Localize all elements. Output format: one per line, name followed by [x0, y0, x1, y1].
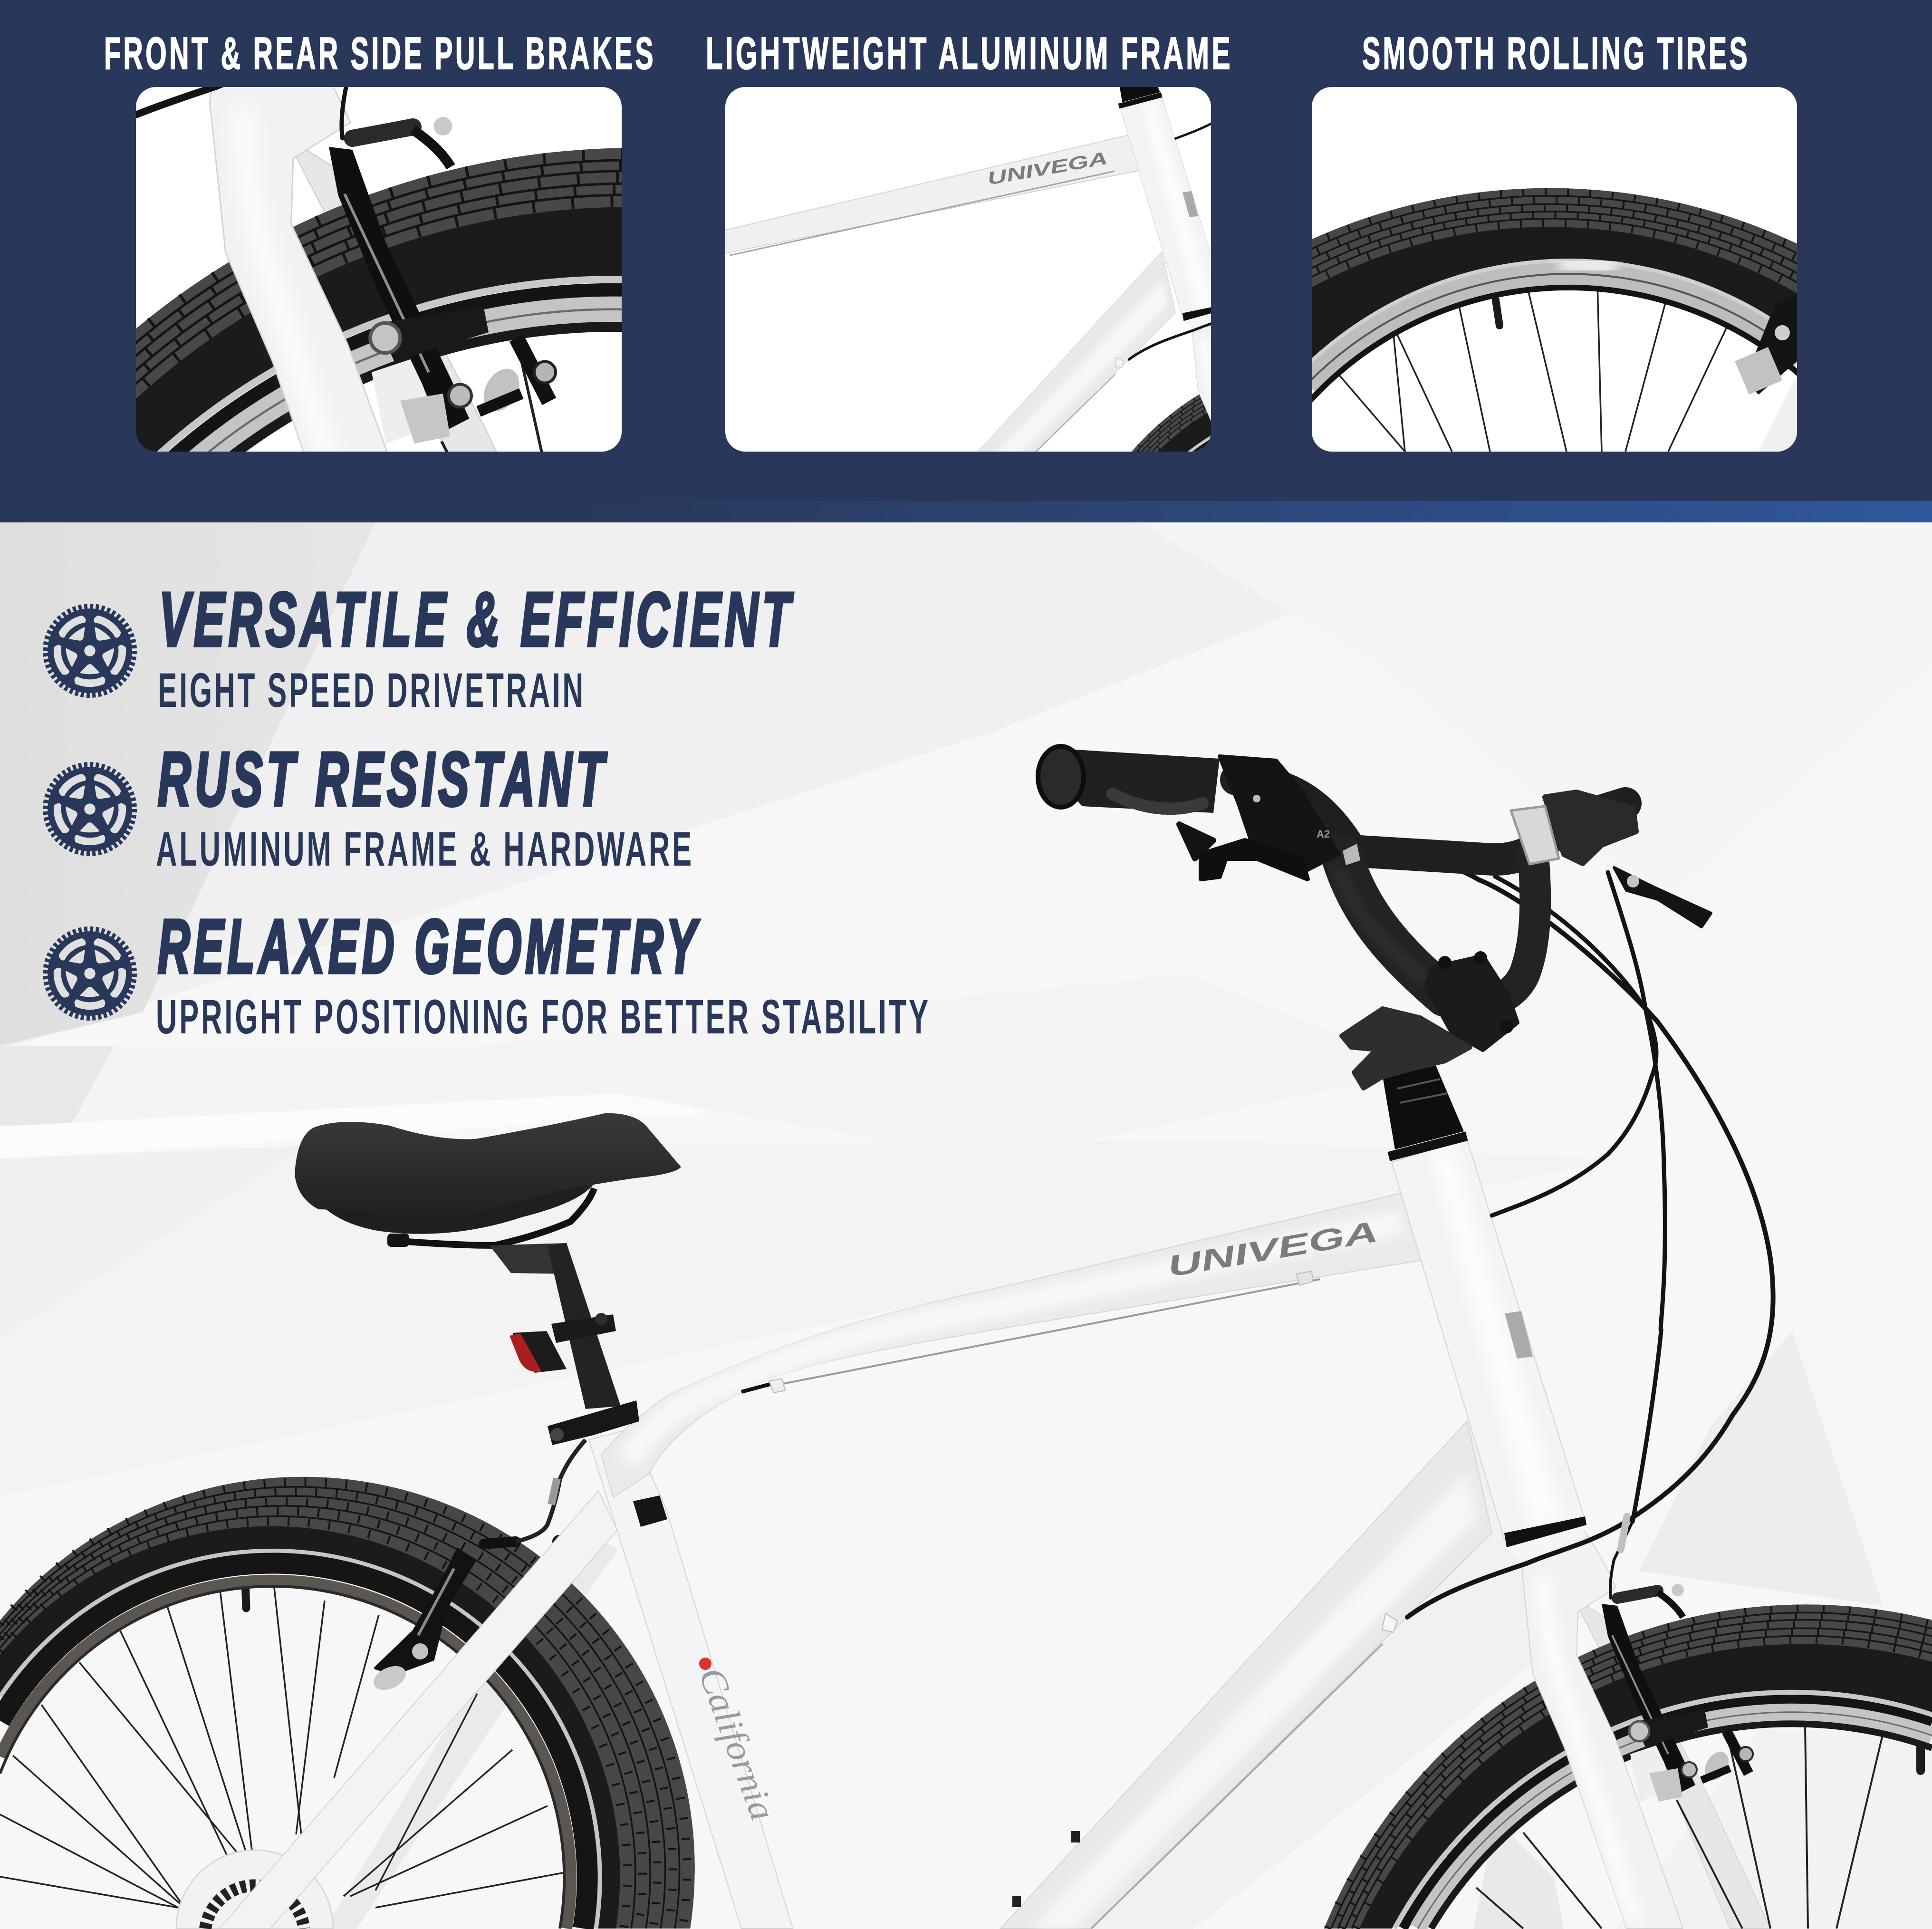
- seat tube: [589, 1429, 793, 1929]
- photo crop: tire close-up: [1307, 87, 1801, 452]
- front fork blade and crown: [1522, 1528, 1692, 1929]
- photo crop: frame close-up: [725, 87, 1211, 452]
- logo: UNIVEGA: UNIVEGA: [1165, 1215, 1380, 1283]
- rear inner seat stay: [325, 1542, 618, 1929]
- head tube: [1392, 1138, 1586, 1562]
- handlebar: [1038, 746, 1711, 1001]
- down tube: [1000, 1421, 1492, 1929]
- panel: lightweight aluminum frame: [707, 37, 1230, 452]
- heading: brakes: FRONT & REAR SIDE PULL BRAKES: [104, 28, 656, 79]
- seat stay: [220, 1491, 617, 1929]
- saddle: [295, 1113, 681, 1247]
- front wheel: [1324, 1604, 1932, 1929]
- brake and shift cables: [1351, 849, 1773, 1617]
- rear brake: [370, 1440, 586, 1695]
- feature: versatile and efficient: [46, 577, 794, 717]
- rear wheel: [0, 1477, 695, 1929]
- feature: rust resistant: [46, 736, 694, 876]
- photo crop: brake close-up: [136, 87, 622, 452]
- cropped top tube with logo: [713, 132, 1141, 256]
- rear wheel and frame back end: [0, 1429, 793, 1929]
- subheading: aluminum: ALUMINUM FRAME & HARDWARE: [156, 822, 694, 876]
- sticker: [633, 1495, 667, 1527]
- front end: wheel, fork, head tube, cables, handlebar: [1038, 746, 1932, 1929]
- heading: geometry: RELAXED GEOMETRY: [158, 904, 700, 989]
- stem and steerer: [1342, 951, 1517, 1157]
- bicycle photo illustration: [0, 746, 1932, 1929]
- top navy band: [0, 0, 1932, 522]
- front fork rear blade: [1573, 1597, 1770, 1929]
- seatpost with clamps and tail light: [490, 1243, 639, 1445]
- heading: rust: RUST RESISTANT: [158, 736, 608, 821]
- top tube: [601, 1187, 1426, 1497]
- panel: front and rear side pull brakes: [106, 37, 653, 452]
- handlebar: A2: [1317, 828, 1330, 840]
- subheading: upright: UPRIGHT POSITIONING FOR BETTER STABILITY: [156, 990, 931, 1044]
- reflector: [1511, 806, 1559, 864]
- front brake: [1602, 1584, 1753, 1802]
- icon: chainring gear: [46, 607, 134, 695]
- background: geometric light section: [0, 522, 1932, 1929]
- icon: chainring gear: [46, 764, 134, 854]
- cropped top tube with logo: UNIVEGA: [986, 148, 1109, 189]
- panel: smooth rolling tires: [1307, 28, 1801, 452]
- seat tube script: California: California: [691, 1662, 783, 1826]
- heading: versatile: VERSATILE & EFFICIENT: [159, 577, 794, 662]
- icon: chainring gear: [46, 929, 134, 1018]
- feature: relaxed geometry: [46, 904, 931, 1044]
- subheading: drivetrain: EIGHT SPEED DRIVETRAIN: [158, 663, 586, 717]
- heading: frame: LIGHTWEIGHT ALUMINUM FRAME: [706, 28, 1233, 79]
- saddle and seatpost assembly: [295, 1113, 681, 1445]
